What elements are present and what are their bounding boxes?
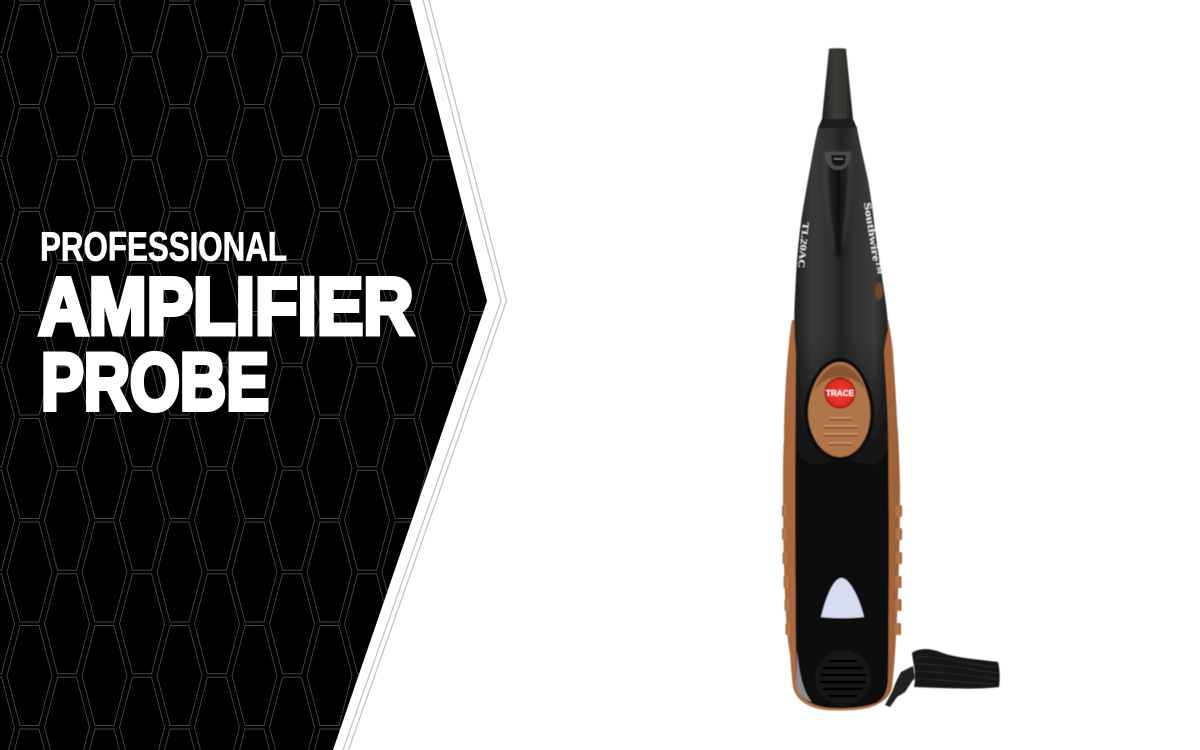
speaker grille — [815, 650, 871, 706]
LED window — [821, 578, 864, 618]
trace button — [824, 378, 856, 408]
title — [38, 224, 414, 428]
trace button housing — [804, 358, 874, 461]
title line: amplifier: AMPLIFIER — [38, 262, 414, 352]
probe tip — [818, 48, 857, 128]
trace button: TRACE — [826, 389, 855, 398]
nose groove and clip — [823, 152, 852, 259]
lanyard strap — [885, 649, 1000, 707]
orange side grips — [782, 320, 902, 711]
model label: TL20AC — [796, 222, 811, 269]
panel: black chevron background — [0, 0, 487, 750]
brand label: Southwire™ — [861, 202, 883, 276]
chevron outline double stroke — [343, 0, 506, 750]
ridges — [824, 418, 857, 445]
product photo: amplifier probe — [782, 48, 1000, 711]
title line: probe: PROBE — [41, 338, 269, 428]
title line: professional: PROFESSIONAL — [40, 224, 287, 270]
black probe body — [794, 128, 889, 708]
brand logo mark — [875, 282, 883, 300]
